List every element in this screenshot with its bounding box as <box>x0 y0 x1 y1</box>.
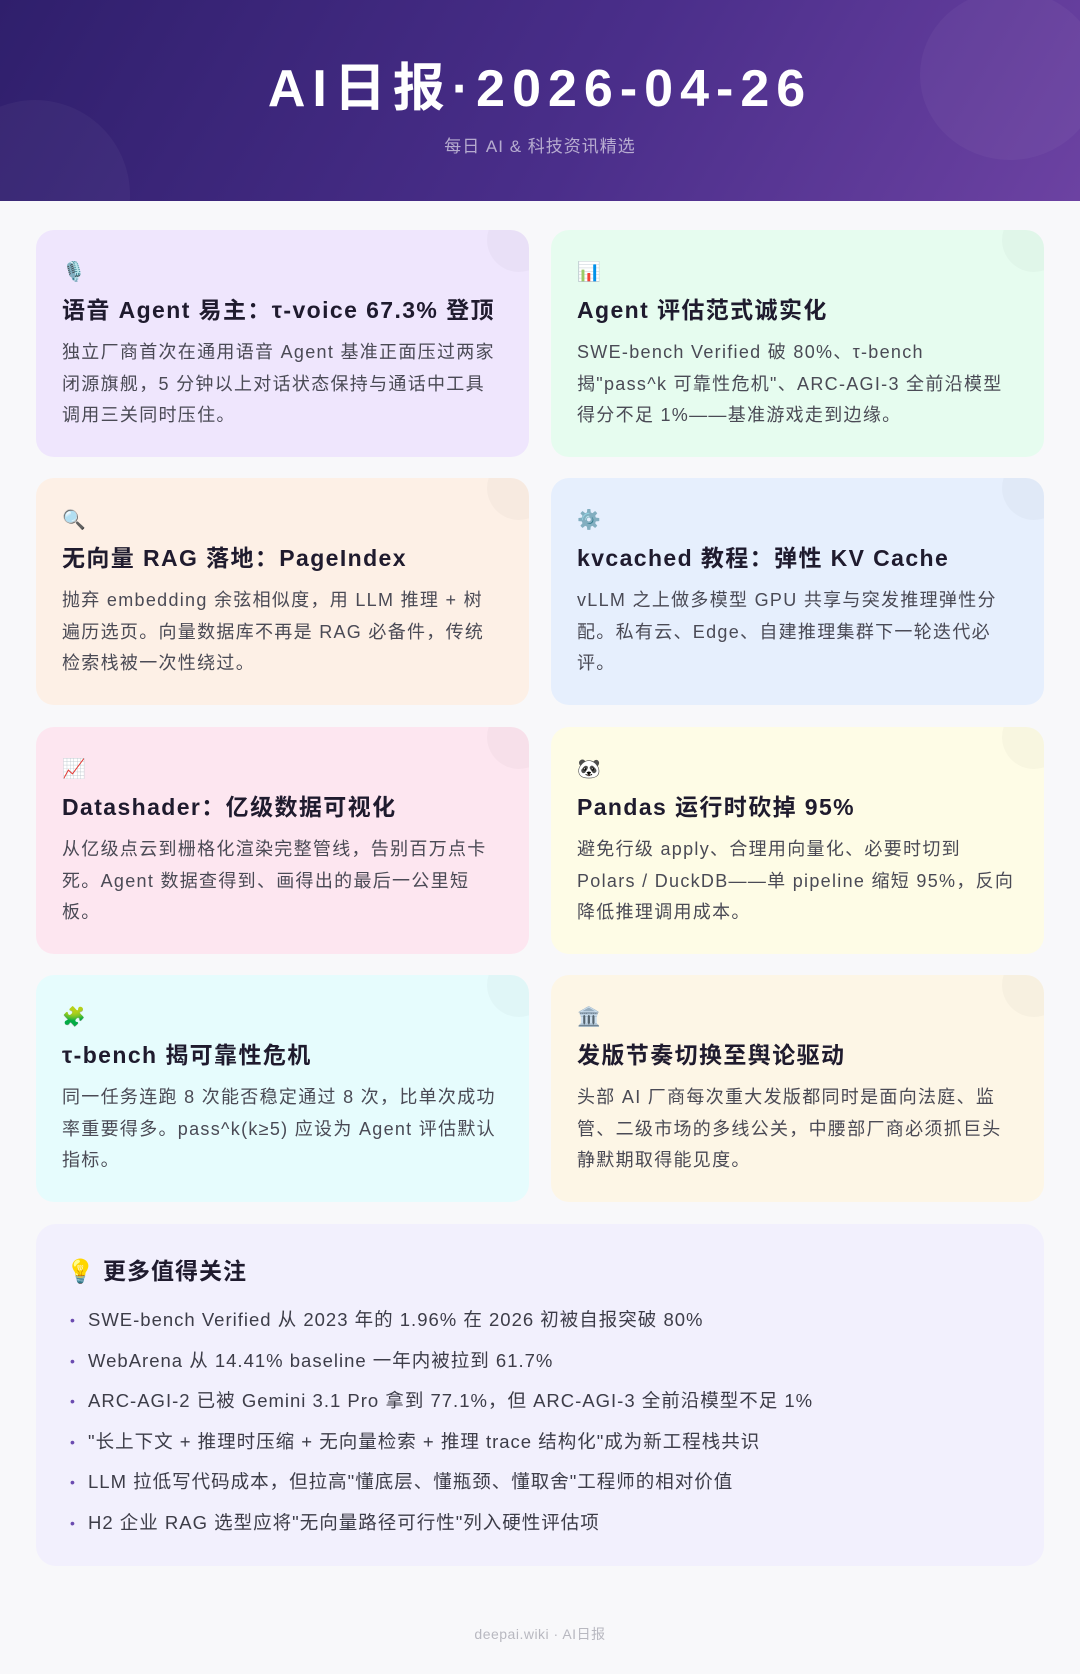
card body: 抛弃 embedding 余弦相似度，用 LLM 推理 + 树遍历选页。向量数据库不再是 RAG 必备件，传统检索栈被一次性绕过。 <box>62 590 484 673</box>
bullet list: ARC-AGI-2 已被 Gemini 3.1 Pro 拿到 77.1%，但 ARC-AGI-3 全前沿模型不足 1% <box>88 1390 813 1411</box>
card title: Agent 评估范式诚实化 <box>577 297 828 323</box>
card: kvcached <box>551 478 1044 705</box>
card: datashader <box>36 727 529 954</box>
card title: Pandas 运行时砍掉 95% <box>577 794 855 820</box>
card title: Datashader：亿级数据可视化 <box>62 794 396 820</box>
subtitle: 每日 AI & 科技资讯精选 <box>444 137 636 156</box>
card body: SWE-bench Verified 破 80%、τ-bench 揭"pass^k 可靠性危机"、ARC-AGI-3 全前沿模型得分不足 1%——基准游戏走到边缘。 <box>577 342 1003 425</box>
card title: 无向量 RAG 落地：PageIndex <box>62 545 407 571</box>
card title: kvcached 教程：弹性 KV Cache <box>577 545 949 571</box>
bullet list: "长上下文 + 推理时压缩 + 无向量检索 + 推理 trace 结构化"成为新工程栈共识 <box>88 1430 760 1452</box>
card: voice agent <box>36 230 529 457</box>
card: agent eval <box>551 230 1044 457</box>
header <box>0 0 1080 201</box>
icon: panda: 🐼 <box>577 759 601 780</box>
bullet list <box>70 1309 813 1532</box>
card title: 语音 Agent 易主：τ-voice 67.3% 登顶 <box>62 297 495 323</box>
icon: trend: 📈 <box>62 759 86 780</box>
footer: deepai.wiki · AI日报 <box>474 1626 606 1642</box>
card: pageindex <box>36 478 529 705</box>
icon: puzzle: 🧩 <box>62 1007 86 1028</box>
card body: 头部 AI 厂商每次重大发版都同时是面向法庭、监管、二级市场的多线公关，中腰部厂商必须抓巨头静默期取得能见度。 <box>577 1087 1002 1170</box>
bullet list: H2 企业 RAG 选型应将"无向量路径可行性"列入硬性评估项 <box>88 1512 600 1532</box>
icon: microphone: 🎙️ <box>62 262 86 283</box>
bullet list: LLM 拉低写代码成本，但拉高"懂底层、懂瓶颈、懂取舍"工程师的相对价值 <box>88 1471 733 1492</box>
icon: magnifier: 🔍 <box>62 510 86 531</box>
icon: gear: ⚙️ <box>577 510 601 531</box>
icon: bank: 🏛️ <box>577 1007 601 1028</box>
card title: 发版节奏切换至舆论驱动 <box>577 1042 845 1068</box>
icon: chart: 📊 <box>577 262 601 283</box>
card: pandas <box>551 727 1044 954</box>
card body: 独立厂商首次在通用语音 Agent 基准正面压过两家闭源旗舰，5 分钟以上对话状态保持与通话中工具调用三关同时压住。 <box>62 342 495 425</box>
card: release rhythm <box>551 975 1044 1202</box>
card body: 避免行级 apply、合理用向量化、必要时切到 Polars / DuckDB——单 pipeline 缩短 95%，反向降低推理调用成本。 <box>577 839 1014 922</box>
card body: vLLM 之上做多模型 GPU 共享与突发推理弹性分配。私有云、Edge、自建推理集群下一轮迭代必评。 <box>577 590 997 673</box>
card: tau-bench <box>36 975 529 1202</box>
title: AI日报·2026-04-26 <box>268 60 812 118</box>
panel: more <box>36 1224 1044 1566</box>
card title: τ-bench 揭可靠性危机 <box>62 1042 312 1068</box>
bullet list: SWE-bench Verified 从 2023 年的 1.96% 在 2026 初被自报突破 80% <box>88 1309 703 1330</box>
card body: 从亿级点云到栅格化渲染完整管线，告别百万点卡死。Agent 数据查得到、画得出的最后一公里短板。 <box>62 839 487 922</box>
more heading: 💡 更多值得关注 <box>66 1258 247 1284</box>
card body: 同一任务连跑 8 次能否稳定通过 8 次，比单次成功率重要得多。pass^k(k≥5) 应设为 Agent 评估默认指标。 <box>62 1087 496 1170</box>
bullet list: WebArena 从 14.41% baseline 一年内被拉到 61.7% <box>88 1350 553 1370</box>
